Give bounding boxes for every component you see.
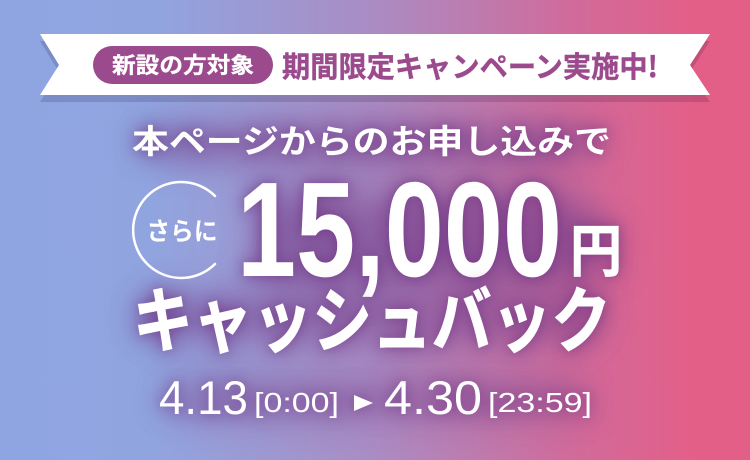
campaign dates: 4.13	[159, 371, 248, 424]
cashback: キャッシュバック	[133, 265, 611, 367]
circle badge: さらに	[146, 212, 218, 248]
circle badge	[133, 182, 218, 278]
campaign dates: 4.30	[384, 371, 482, 424]
soft purple glow behind text	[140, 130, 600, 413]
campaign dates	[159, 371, 592, 424]
ribbon	[40, 34, 710, 95]
campaign dates: [23:59]	[488, 387, 592, 418]
ribbon headline: 期間限定キャンペーン実施中!	[282, 44, 658, 86]
ribbon banner	[40, 34, 710, 102]
campaign dates: [0:00]	[254, 387, 339, 418]
white text group	[132, 115, 622, 424]
amount: 15,000	[237, 154, 562, 305]
badge: target audience: 新設の方対象	[112, 48, 254, 80]
open circle arc	[133, 182, 215, 278]
ribbon shadow	[40, 41, 710, 102]
arrow	[354, 395, 373, 411]
badge: target audience	[93, 46, 273, 84]
lead text: 本ページからのお申し込みで	[132, 115, 611, 163]
amount: 円	[570, 206, 622, 288]
